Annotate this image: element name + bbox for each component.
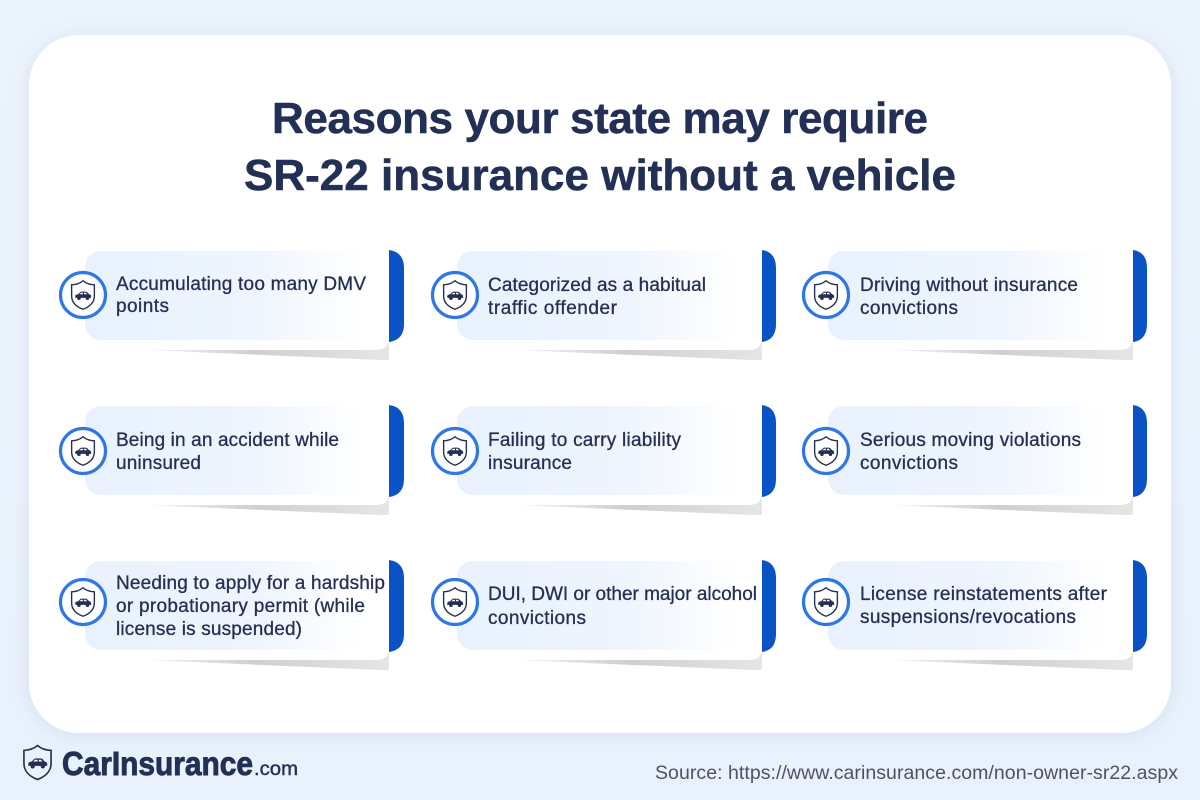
- card: Serious moving violations convictions: [804, 405, 1147, 515]
- card: Being in an accident while uninsured: uninsured: [116, 453, 201, 474]
- card: License reinstatements after suspensions/revocations: License reinstatements after: [860, 584, 1108, 605]
- card: Failing to carry liability insurance: [432, 405, 776, 515]
- card: DUI, DWI or other major alcohol convictions: [432, 560, 776, 670]
- card: Categorized as a habitual traffic offender: traffic offender: [488, 298, 618, 319]
- card: DUI, DWI or other major alcohol convictions: DUI, DWI or other major alcohol: [488, 584, 757, 605]
- card: Needing to apply for a hardship permit: or probationary permit (while: [116, 596, 365, 617]
- card: License reinstatements after suspensions/revocations: suspensions/revocations: [860, 607, 1076, 628]
- card: Categorized as a habitual traffic offender: Categorized as a habitual: [488, 275, 706, 296]
- card: Accumulating too many DMV points: [60, 250, 404, 360]
- card: Serious moving violations convictions: convictions: [860, 453, 958, 474]
- card: Failing to carry liability insurance: Failing to carry liability: [488, 430, 682, 451]
- source line: Source: https://www.carinsurance.com/non-owner-sr22.aspx: [655, 762, 1178, 784]
- card: Accumulating too many DMV points: Accumulating too many DMV: [116, 274, 366, 295]
- card: Being in an accident while uninsured: [60, 405, 404, 515]
- card: Categorized as a habitual traffic offender: [432, 250, 776, 360]
- card: DUI, DWI or other major alcohol convictions: convictions: [488, 608, 586, 629]
- card: License reinstatements after suspensions/revocations: [804, 560, 1147, 670]
- title: Reasons your state may require: [272, 94, 928, 143]
- card: Failing to carry liability insurance: insurance: [488, 453, 572, 474]
- card: Serious moving violations convictions: Serious moving violations: [860, 430, 1081, 451]
- card: Driving without insurance convictions: convictions: [860, 298, 958, 319]
- title: [244, 94, 956, 200]
- card: Needing to apply for a hardship permit: [60, 560, 404, 670]
- logo: CarInsurance.com: .com: [254, 759, 298, 780]
- logo: CarInsurance.com: CarInsurance: [62, 745, 253, 782]
- card: Needing to apply for a hardship permit: Needing to apply for a hardship: [116, 573, 385, 594]
- title: SR-22 insurance without a vehicle: [244, 151, 956, 200]
- card: Driving without insurance convictions: [804, 250, 1147, 360]
- card: Being in an accident while uninsured: Being in an accident while: [116, 430, 339, 451]
- card: Accumulating too many DMV points: points: [116, 296, 169, 317]
- card: Driving without insurance convictions: Driving without insurance: [860, 275, 1078, 296]
- card: Needing to apply for a hardship permit: license is suspended): [116, 619, 302, 640]
